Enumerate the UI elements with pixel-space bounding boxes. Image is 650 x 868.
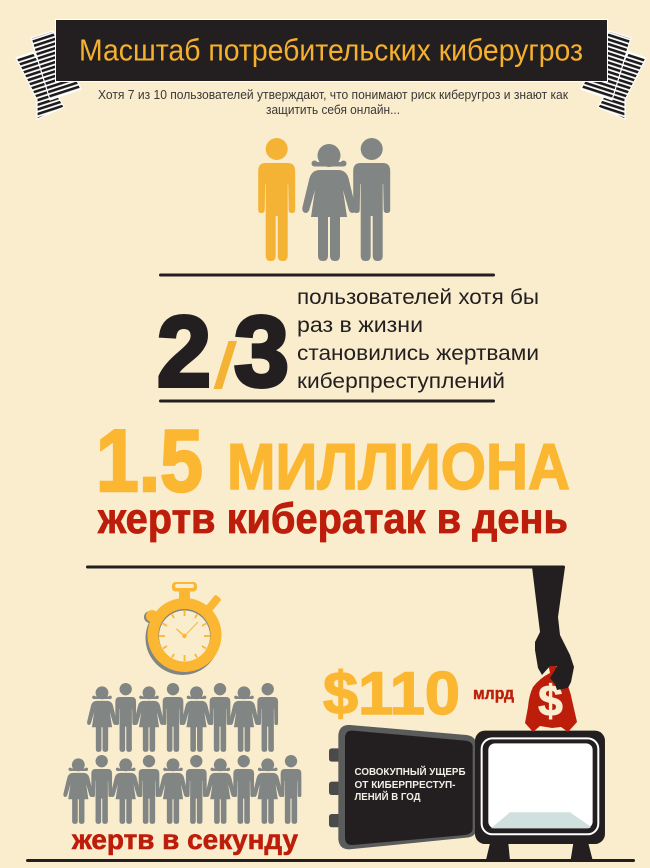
stat description: [297, 286, 539, 393]
page bottom rule: [26, 859, 635, 862]
icon: grey man: [353, 138, 390, 261]
headline: 1.5 million: [96, 411, 570, 510]
stat: 110 billion: [323, 660, 514, 727]
intro text: [98, 87, 568, 117]
icon: stopwatch: [144, 582, 222, 675]
safe door: [338, 725, 476, 849]
stat: two thirds: 3: [234, 296, 289, 408]
banner ribbon right tails: [581, 31, 646, 119]
safe body: [475, 731, 605, 844]
title: Масштаб потребительских киберугроз: [79, 32, 583, 68]
stat description: пользователей хотя бы: [297, 286, 539, 309]
safe door text: [354, 765, 466, 803]
icon: three people: [258, 138, 390, 261]
icon: yellow man: [258, 138, 295, 261]
bottom divider: [159, 400, 495, 402]
stat description: раз в жизни: [297, 314, 423, 337]
section divider: [86, 566, 565, 568]
icon: money bag: [525, 658, 577, 732]
intro text: Хотя 7 из 10 пользователей утверждают, что понимают риск киберугроз и знают как: [98, 87, 568, 102]
icon: grey woman: [302, 144, 356, 261]
headline: 1.5 million: МИЛЛИОНА: [227, 430, 570, 503]
safe hinges: [329, 748, 341, 827]
headline: 1.5 million: 1.5: [96, 411, 203, 510]
stat description: становились жертвами: [297, 342, 539, 365]
banner ribbon left tails: [16, 31, 81, 119]
icon row: lower crowd: [63, 755, 301, 824]
stat: 110 billion: $110: [323, 660, 460, 727]
stat: two thirds: [157, 296, 289, 408]
title banner: [56, 20, 608, 82]
safe door text: ОТ КИБЕРПРЕСТУП-: [354, 780, 456, 791]
stat: two thirds: 2: [157, 296, 211, 408]
safe door text: СОВОКУПНЫЙ УЩЕРБ: [354, 765, 466, 778]
safe legs: [486, 843, 593, 860]
intro text: защитить себя онлайн...: [266, 102, 400, 117]
icon row: upper crowd: [87, 683, 278, 752]
icon: safe: [329, 725, 605, 860]
dollar sign: $: [538, 677, 563, 726]
safe interior floor: [491, 812, 591, 828]
stat description: киберпреступлений: [297, 370, 505, 393]
subheadline: жертв кибератак в день: [97, 495, 568, 543]
top divider: [159, 274, 495, 276]
caption: victims per second: жертв в секунду: [71, 824, 298, 855]
safe door text: ЛЕНИЙ В ГОД: [354, 790, 420, 803]
stat: 110 billion: млрд: [473, 684, 514, 703]
icon: hand and arm: [532, 567, 574, 690]
